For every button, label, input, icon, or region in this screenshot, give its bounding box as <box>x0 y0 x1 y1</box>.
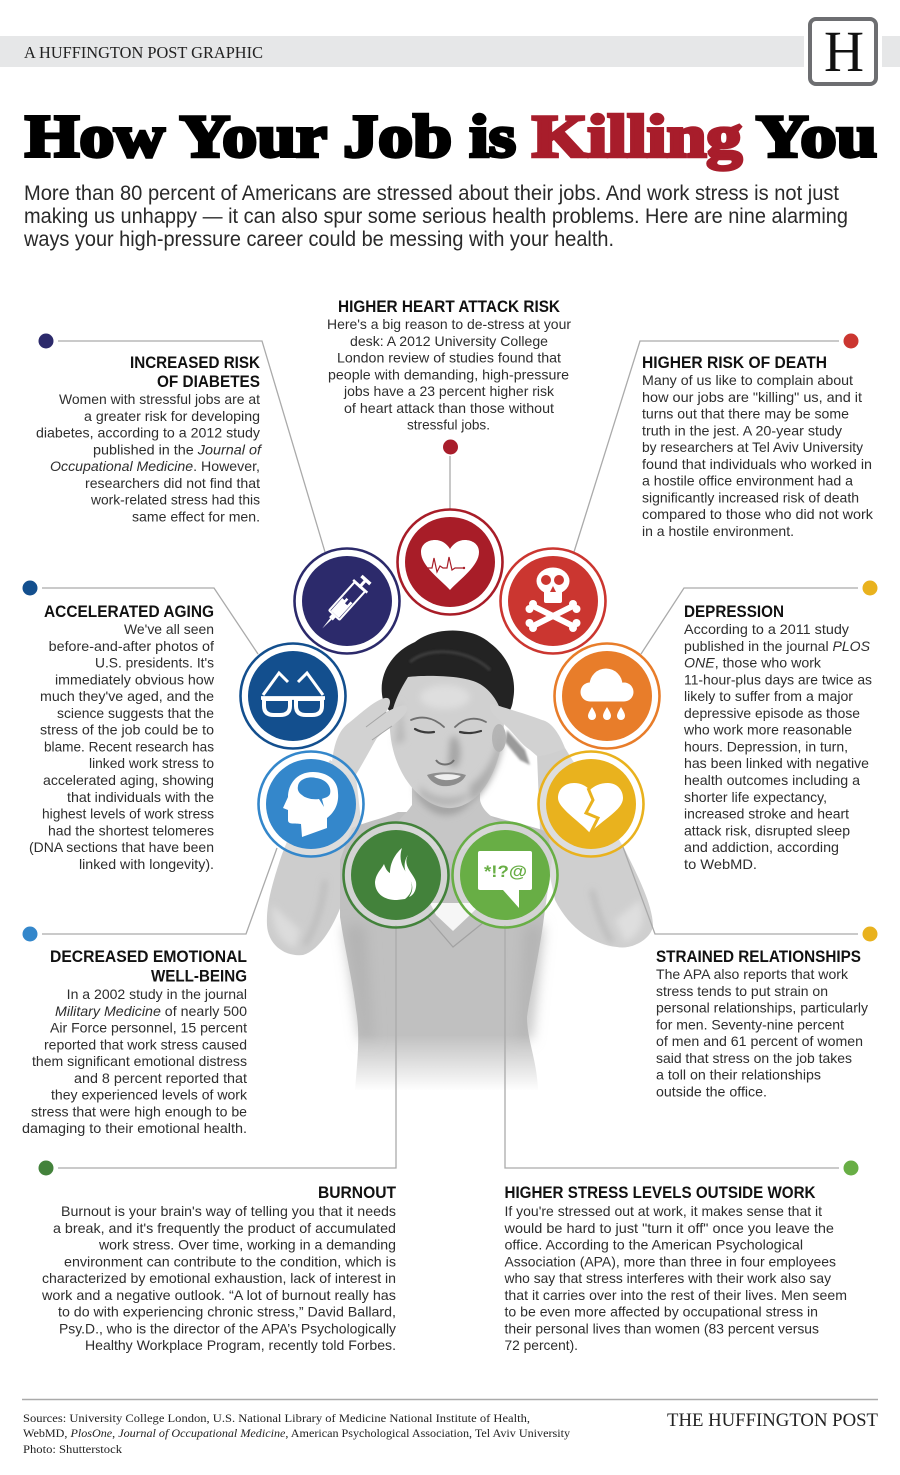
marker dot <box>22 926 38 942</box>
icon: flame <box>344 822 448 928</box>
panel: depression: hours. Depression, in turn, <box>684 740 848 754</box>
panel: strained relationships: for men. Seventy-nine percent <box>656 1017 844 1032</box>
panel: higher risk of death: in a hostile environment. <box>642 524 794 539</box>
panel: increased risk of diabetes: Women with stressful jobs are at <box>59 392 260 407</box>
marker dot <box>443 440 458 454</box>
panel: depression: and addiction, according <box>684 840 839 855</box>
panel: burnout: a break, and it's frequently the product of accumulated <box>53 1221 396 1236</box>
panel: depression: depressive episode as those <box>684 706 860 721</box>
sweater shading <box>345 925 542 1040</box>
panel: burnout: characterized by emotional exhaustion, lack of interest in <box>42 1271 396 1286</box>
panel: accelerated aging: highest levels of work stress <box>42 807 214 822</box>
panel: strained relationships: personal relationships, particularly <box>656 1001 868 1016</box>
panel: decreased emotional well-being <box>22 926 247 1136</box>
panel: burnout: BURNOUT <box>318 1184 396 1202</box>
panel: decreased emotional well-being: stress that were high enough to be <box>31 1104 247 1120</box>
panel: higher heart attack risk: desk: A 2012 University College <box>350 334 548 349</box>
panel: accelerated aging: had the shortest telomeres <box>48 823 214 838</box>
header bar: A HUFFINGTON POST GRAPHIC <box>24 43 263 62</box>
panel: higher stress levels outside work <box>503 1160 858 1353</box>
panel: accelerated aging <box>22 580 214 872</box>
right hand shadow <box>505 730 530 765</box>
panel: accelerated aging: immediately obvious how <box>55 672 214 687</box>
marker dot <box>862 580 878 596</box>
title: You <box>756 104 877 170</box>
panel: higher heart attack risk: Here's a big reason to de-stress at your <box>327 317 571 332</box>
panel: higher stress levels outside work: who say that stress interferes with their work also say <box>503 1271 831 1286</box>
panel: strained relationships: of men and 61 percent of women <box>656 1034 863 1049</box>
panel: depression: shorter life expectancy, <box>684 790 827 805</box>
icon: speech bubble <box>452 822 558 928</box>
neck shadow <box>416 775 478 815</box>
panel: increased risk of diabetes: diabetes, according to a 2012 study <box>36 426 260 441</box>
panel: depression: health outcomes including a <box>684 773 860 788</box>
panel: decreased emotional well-being: In a 2002 study in the journal <box>67 987 247 1002</box>
panel: strained relationships <box>656 926 878 1100</box>
intro text <box>23 182 848 251</box>
panel: burnout: environment can contribute to the condition, which is <box>64 1254 396 1269</box>
marker dot <box>844 1160 858 1176</box>
mouth <box>427 772 466 786</box>
intro text: ways your high-pressure career could be messing with your health. <box>23 228 614 251</box>
intro text: making us unhappy — it can also spur some serious health problems. Here are nine alarming <box>24 205 848 228</box>
panel: increased risk of diabetes <box>36 334 262 524</box>
hair sheen <box>410 652 490 670</box>
panel: higher risk of death <box>642 334 873 539</box>
panel: depression: attack risk, disrupted sleep <box>684 823 850 838</box>
panel: accelerated aging: U.S. presidents. It's <box>95 656 214 671</box>
panel: burnout: to do with experiencing chronic stress,” David Ballard, <box>58 1305 396 1320</box>
sources: WebMD, PlosOne, Journal of Occupational Medicine, American Psychological Association, Tel Aviv University <box>23 1426 570 1440</box>
panel: decreased emotional well-being: and 8 percent reported that <box>74 1071 247 1086</box>
sleeve highlights and folds <box>272 880 643 948</box>
panel: decreased emotional well-being: they experienced levels of work <box>51 1088 247 1103</box>
title: Killing <box>532 104 742 170</box>
panel: higher heart attack risk: stressful jobs. <box>407 418 490 433</box>
panel: decreased emotional well-being: Military Medicine of nearly 500 <box>55 1004 247 1019</box>
panel: higher stress levels outside work: If you're stressed out at work, it makes sense that it <box>504 1204 822 1219</box>
eyebrows and eyes <box>411 718 486 733</box>
panel: decreased emotional well-being: them significant emotional distress <box>32 1054 247 1069</box>
panel: increased risk of diabetes: INCREASED RISK <box>130 354 260 372</box>
panel: depression: published in the journal PLOS <box>684 639 870 654</box>
panel: increased risk of diabetes: work-related stress had this <box>90 493 260 508</box>
icon: broken heart <box>538 752 644 856</box>
panel: accelerated aging: before-and-after photos of <box>49 639 214 654</box>
panel: accelerated aging: (DNA sections that have been <box>29 840 214 855</box>
panel: higher heart attack risk: jobs have a 23 percent higher risk <box>343 384 554 399</box>
icon: skull and crossbones <box>500 548 606 654</box>
panel: higher heart attack risk: people with demanding, high-pressure <box>328 367 569 382</box>
icon: head with brain <box>258 752 364 856</box>
panel: strained relationships: outside the office. <box>656 1084 767 1100</box>
footer logotype: THE HUFFINGTON POST <box>667 1411 878 1431</box>
panel: depression: to WebMD. <box>684 857 757 872</box>
panel: strained relationships: said that stress on the job takes <box>656 1051 852 1066</box>
hair <box>382 630 514 718</box>
leader lines <box>42 341 858 1168</box>
icon: speech bubble: *!?@ <box>484 863 527 881</box>
icon: heart with pulse <box>398 510 502 614</box>
neck <box>398 770 498 850</box>
panel: decreased emotional well-being: Air Force personnel, 15 percent <box>50 1021 247 1036</box>
panel: depression: increased stroke and heart <box>684 807 849 822</box>
panel: increased risk of diabetes: same effect for men. <box>132 510 260 524</box>
panel: depression: who work more reasonable <box>683 723 852 738</box>
panel: accelerated aging: that individuals with the <box>67 790 214 805</box>
panel: accelerated aging: accelerated aging, showing <box>43 773 214 788</box>
panel: higher risk of death: found that individuals who worked in <box>642 457 872 472</box>
logo: H: H <box>824 19 864 84</box>
panel: accelerated aging: blame. Recent research has <box>44 740 214 754</box>
panel: higher heart attack risk: of heart attack than those without <box>344 401 554 416</box>
panel: increased risk of diabetes: a greater risk for developing <box>84 409 260 424</box>
panel: higher stress levels outside work: HIGHER STRESS LEVELS OUTSIDE WORK <box>504 1184 816 1202</box>
panel: accelerated aging: linked work stress to <box>89 756 214 771</box>
torso fade <box>330 1035 560 1091</box>
panel: decreased emotional well-being: WELL-BEING <box>151 968 247 986</box>
left sleeve <box>267 760 362 955</box>
panel: higher risk of death: significantly increased risk of death <box>642 490 859 506</box>
header bar <box>0 36 900 67</box>
panel: depression <box>683 580 878 872</box>
torso <box>340 812 552 1090</box>
panel: accelerated aging: We've all seen <box>124 622 214 637</box>
logo: H <box>804 15 882 88</box>
panel: burnout <box>38 1160 396 1353</box>
panel: increased risk of diabetes: researchers did not find that <box>85 476 260 491</box>
shirt <box>430 903 482 931</box>
panel: burnout: work and a negative outlook. “A lot of burnout really has <box>41 1288 396 1303</box>
marker dot <box>38 1160 54 1176</box>
panel: higher stress levels outside work: office. According to the American Psychological <box>504 1238 803 1253</box>
photo: stressed woman <box>267 630 653 1091</box>
panel: strained relationships: STRAINED RELATIONSHIPS <box>656 948 861 966</box>
icon: syringe <box>294 548 400 654</box>
left finger separations <box>366 712 392 740</box>
panel: higher stress levels outside work: would be hard to just "turn it off" once you leave the <box>503 1221 834 1236</box>
panel: burnout: Psy.D., who is the director of the APA’s Psychologically <box>59 1322 396 1336</box>
panel: depression: has been linked with negative <box>684 756 869 771</box>
icon: rain cloud <box>554 644 660 748</box>
sources: Photo: Shutterstock <box>23 1442 122 1456</box>
panel: higher heart attack risk: HIGHER HEART ATTACK RISK <box>338 298 560 316</box>
panel: higher risk of death: by researchers at Tel Aviv University <box>642 440 863 455</box>
right sleeve <box>537 748 653 948</box>
left hand <box>332 698 407 776</box>
panel: depression: According to a 2011 study <box>684 622 849 637</box>
marker dot <box>22 580 38 596</box>
panel: depression: ONE, those who work <box>684 656 821 671</box>
nose <box>436 760 454 764</box>
panel: increased risk of diabetes: Occupational Medicine . However, <box>50 459 260 474</box>
panel: higher stress levels outside work: Association (APA), more than three in four employees <box>504 1254 836 1269</box>
panel: higher stress levels outside work: 72 percent). <box>504 1338 578 1353</box>
title: How Your Job is <box>25 104 516 170</box>
panel: accelerated aging: linked with longevity). <box>79 857 214 872</box>
panel: accelerated aging: science suggests that the <box>57 706 214 721</box>
panel: strained relationships: stress tends to put strain on <box>656 984 828 999</box>
panel: depression: DEPRESSION <box>684 603 784 621</box>
sources <box>23 1411 570 1456</box>
panel: higher stress levels outside work: their personal lives than women (83 percent versus <box>504 1322 819 1336</box>
panel: higher stress levels outside work: to be even more affected by occupational stress in <box>504 1305 818 1320</box>
panel: higher heart attack risk <box>327 298 571 454</box>
panel: higher risk of death: HIGHER RISK OF DEATH <box>642 354 827 372</box>
panel: burnout: work stress. Over time, working in a demanding <box>98 1238 396 1253</box>
panel: higher risk of death: turns out that there may be some <box>642 407 849 422</box>
panel: burnout: Burnout is your brain's way of telling you that it needs <box>61 1204 396 1219</box>
intro text: More than 80 percent of Americans are stressed about their jobs. And work stress is not just <box>24 182 839 205</box>
panel: decreased emotional well-being: DECREASED EMOTIONAL <box>50 948 247 966</box>
panel: higher risk of death: truth in the jest. A 20-year study <box>642 423 842 438</box>
panel: higher risk of death: a hostile office environment had a <box>642 474 853 489</box>
panel: accelerated aging: much they've aged, and the <box>40 689 214 704</box>
panel: decreased emotional well-being: damaging to their emotional health. <box>22 1121 247 1136</box>
marker dot <box>38 334 54 348</box>
panel: higher risk of death: Many of us like to complain about <box>642 373 853 388</box>
marker dot <box>862 926 878 942</box>
right hand <box>490 704 565 756</box>
panel: higher risk of death: compared to those who did not work <box>642 507 873 522</box>
sources: Sources: University College London, U.S. National Library of Medicine National Institute of Health, <box>23 1411 530 1425</box>
panel: higher heart attack risk: London review of studies found that <box>337 351 561 366</box>
v-neck stitching <box>428 918 484 947</box>
panel: strained relationships: The APA also reports that work <box>656 967 848 982</box>
ear <box>492 724 506 752</box>
icon: glasses <box>240 644 346 748</box>
panel: higher stress levels outside work: that it carries over into the rest of their lives. Men seem <box>504 1288 847 1303</box>
panel: strained relationships: a toll on their relationships <box>656 1068 821 1083</box>
panel: accelerated aging: ACCELERATED AGING <box>44 603 214 621</box>
panel: burnout: Healthy Workplace Program, recently told Forbes. <box>85 1338 396 1353</box>
title <box>25 104 877 170</box>
panel: decreased emotional well-being: reported that work stress caused <box>44 1037 247 1052</box>
panel: increased risk of diabetes: OF DIABETES <box>157 373 260 391</box>
panel: accelerated aging: stress of the job could be to <box>40 723 214 738</box>
face <box>390 670 504 808</box>
face shading <box>395 685 503 805</box>
panel: increased risk of diabetes: published in the Journal of <box>93 442 262 457</box>
footer divider <box>22 1398 878 1400</box>
marker dot <box>844 334 858 348</box>
panel: higher risk of death: how our jobs are "killing" us, and it <box>642 390 862 405</box>
panel: depression: 11-hour-plus days are twice as <box>684 672 872 687</box>
panel: depression: likely to suffer from a major <box>684 689 853 704</box>
